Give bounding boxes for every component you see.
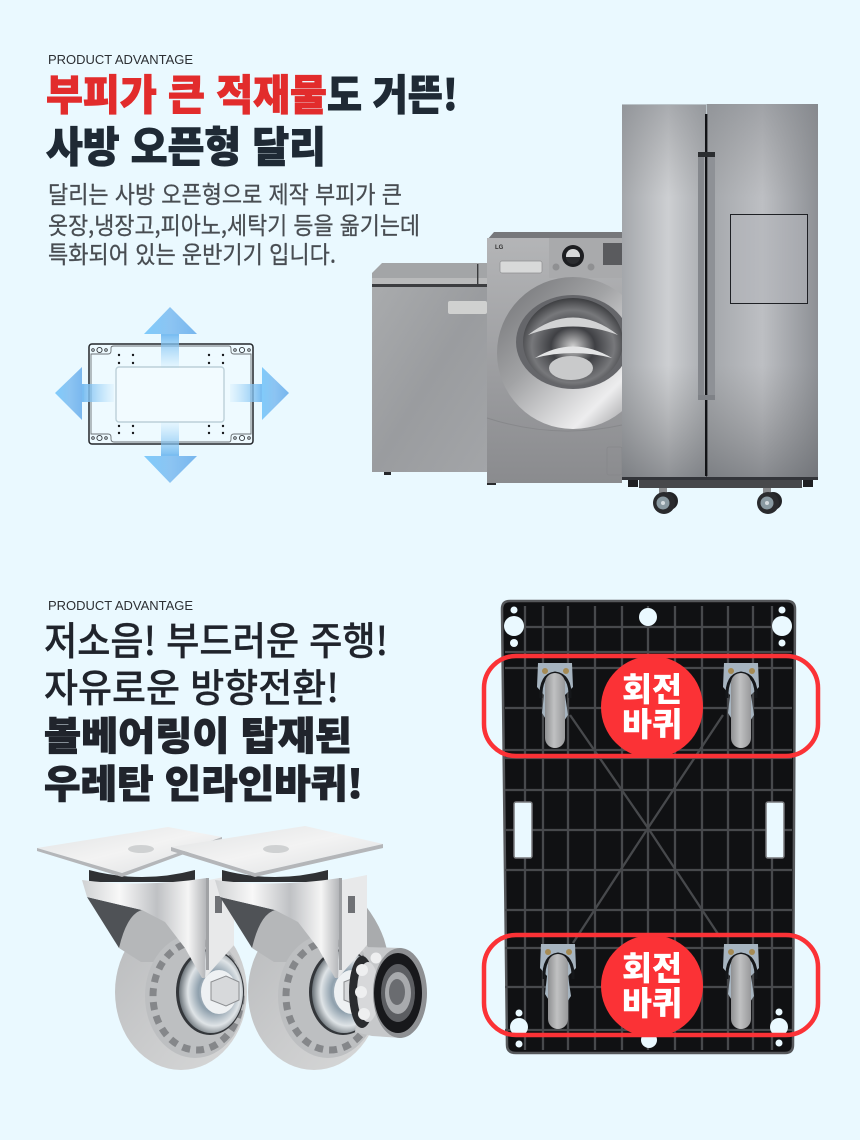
heading: top section: 사방 오픈형 달리: [46, 114, 326, 175]
heading: top section: 도 거뜬!: [327, 62, 458, 123]
callout: bottom swivel wheels: 바퀴: [622, 977, 682, 1025]
body text: description: 옷장,냉장고,피아노,세탁기 등을 옮기는데: [48, 206, 420, 241]
pallet grid: [505, 606, 792, 1050]
dolly platform: [622, 476, 818, 488]
pallet body: [502, 601, 795, 1053]
heading: top section: 부피가 큰 적재물: [46, 62, 327, 123]
callout: top swivel wheels: 바퀴: [622, 698, 682, 746]
heading: bottom section: 볼베어링이 탑재된: [44, 706, 352, 762]
arrow: left: [55, 367, 114, 420]
illustration: casters with bearing: [37, 826, 427, 1070]
callout: top swivel wheels: 회전: [622, 663, 682, 711]
icon: ball bearing: [349, 947, 427, 1038]
caster: front: [171, 826, 388, 1070]
arrow: right: [230, 367, 289, 420]
callout: top swivel wheels: [484, 656, 818, 758]
illustration: refrigerator on dolly: [622, 104, 818, 514]
callout: bottom swivel wheels: 회전: [622, 942, 682, 990]
arrow: up: [144, 307, 197, 368]
body text: description: 달리는 사방 오픈형으로 제작 부피가 큰: [48, 175, 402, 210]
caster: bottom right: [723, 944, 759, 1029]
section label: bottom product advantage: PRODUCT ADVANTAGE: [48, 598, 193, 613]
diagram: four-way open dolly with arrows: [55, 307, 289, 483]
illustration: washing machine: LG: [495, 245, 504, 251]
arrow: down: [144, 422, 197, 483]
callout: bottom swivel wheels: [484, 935, 818, 1037]
section label: top product advantage: PRODUCT ADVANTAGE: [48, 52, 193, 67]
heading: top section: [46, 62, 458, 175]
body text: description: [48, 175, 420, 270]
dolly wheels: [653, 486, 782, 514]
caster: top right: [723, 663, 759, 748]
caster: bottom left: [540, 944, 576, 1029]
pallet holes and slots: [504, 606, 792, 1048]
caster: top left: [537, 663, 573, 748]
body text: description: 특화되어 있는 운반기기 입니다.: [48, 235, 336, 270]
heading: bottom section: [44, 611, 388, 810]
heading: bottom section: 저소음! 부드러운 주행!: [44, 611, 388, 667]
plate outline: [89, 344, 253, 444]
illustration: chest freezer: [372, 263, 487, 475]
heading: bottom section: 자유로운 방향전환!: [44, 658, 339, 714]
illustration: washing machine: [487, 232, 649, 485]
caster: rear: [37, 827, 247, 1070]
illustration: dolly underside: [502, 601, 795, 1053]
heading: bottom section: 우레탄 인라인바퀴!: [44, 754, 363, 810]
